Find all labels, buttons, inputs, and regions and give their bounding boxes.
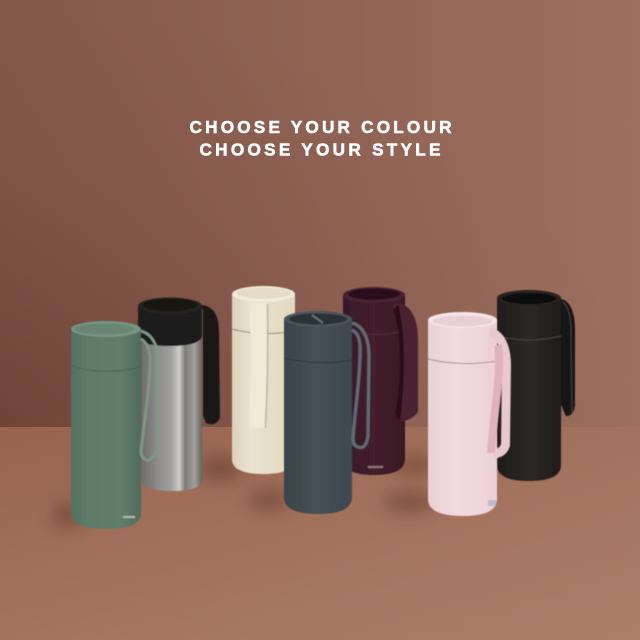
mug: cream <box>232 286 295 474</box>
mug: pink <box>428 312 506 516</box>
mug: black <box>497 290 575 481</box>
heading: CHOOSE YOUR COLOUR <box>190 117 452 137</box>
mug: plum <box>343 287 418 475</box>
heading: CHOOSE YOUR STYLE <box>200 140 440 160</box>
background wall <box>0 0 640 428</box>
mug: dark grey <box>284 311 369 514</box>
floor shadows <box>52 455 439 527</box>
floor <box>0 427 640 640</box>
heading <box>190 117 452 160</box>
mug: sage green <box>71 321 158 529</box>
mug: steel with black lid <box>138 298 220 491</box>
